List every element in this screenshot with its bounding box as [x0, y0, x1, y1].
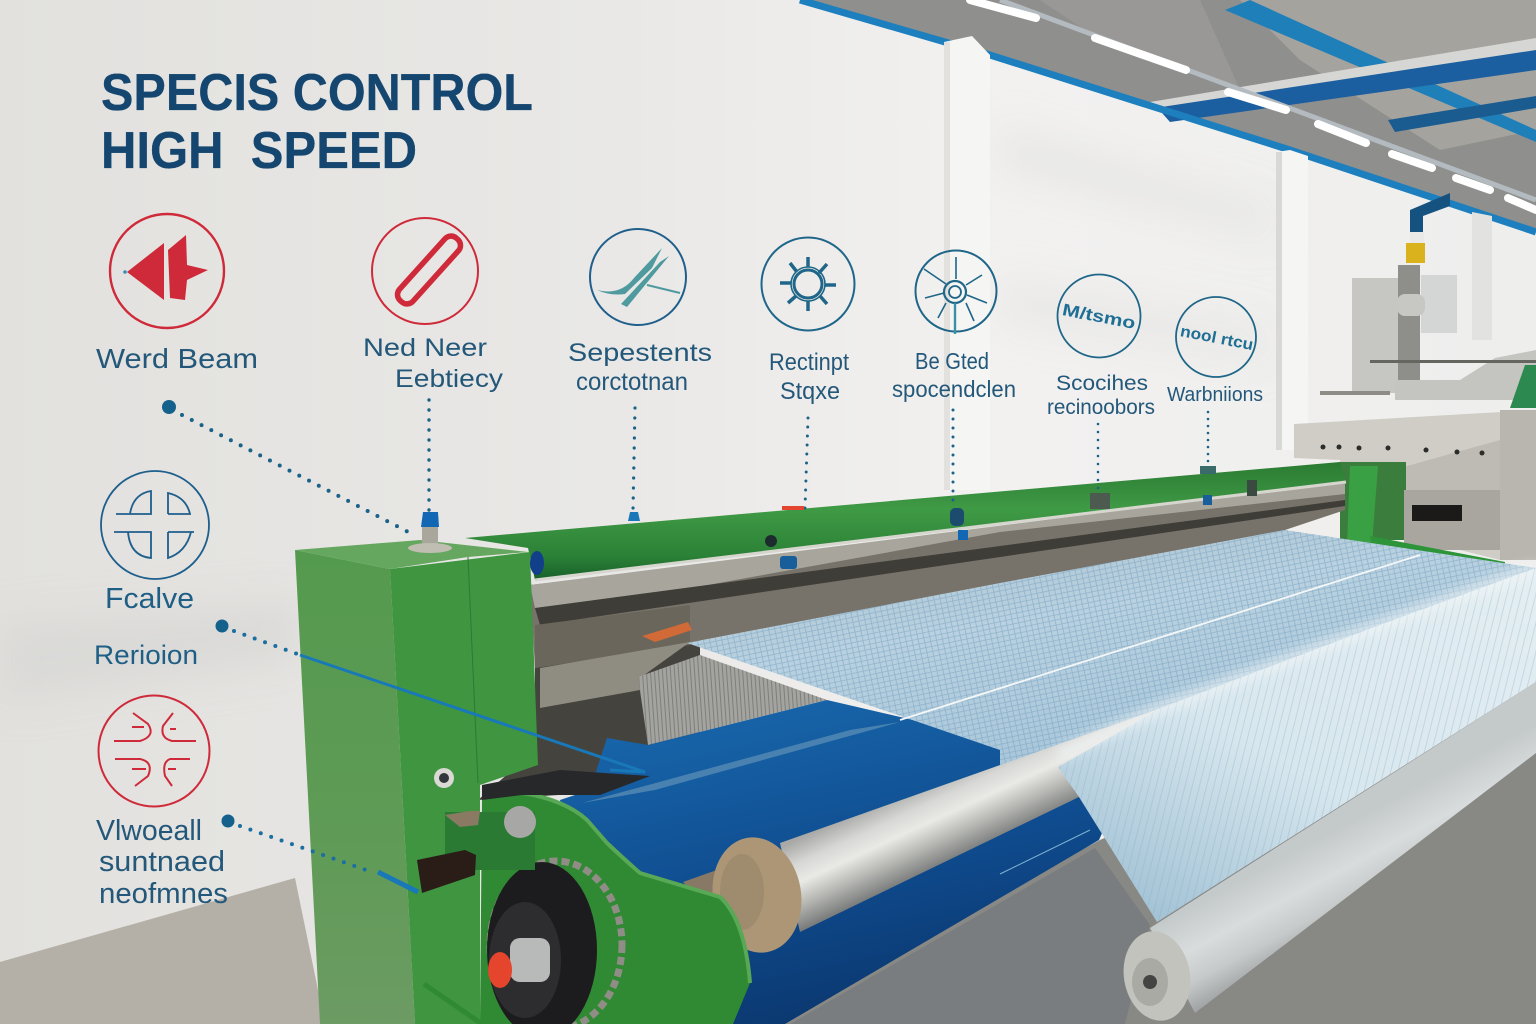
motion-blurred floor band [790, 848, 1150, 1024]
icon: Rectinpt Stoxe [762, 238, 854, 330]
label: Be Gted spocendclen [892, 348, 1016, 402]
icon: Mrtsmo badge [1058, 274, 1140, 358]
label: Sepestents corctotnan [568, 339, 712, 396]
ceiling [800, 0, 1536, 232]
label: Vlwoeall suntnaed neofmnes [96, 815, 228, 910]
large silver roll [780, 708, 1161, 932]
dark loom interior [478, 620, 700, 800]
label: Vlwoeall suntnaed neofmnes: Vlwoeall [96, 815, 202, 847]
icon: Be Gted [916, 250, 996, 334]
dotted leader: Sepestents [633, 408, 635, 510]
dotted leader: Scocihes [1097, 424, 1099, 498]
icon: Fcalve [101, 471, 209, 579]
title: HIGH SPEED [101, 122, 417, 180]
icon: nool rtcu badge [1176, 297, 1256, 377]
dotted leader: Be Gted [952, 410, 954, 505]
label: Fcalve: Fcalve [105, 583, 194, 615]
ceiling lights [970, 0, 1536, 210]
label: Ned Neer Eebtiecy: Eebtiecy [395, 365, 504, 393]
blue drum [560, 700, 1161, 1024]
icon: nool rtcu badge: nool rtcu [1179, 323, 1255, 354]
icon: Vlwoeall [98, 696, 210, 806]
wall pillars [944, 36, 1492, 490]
label: Rectinpt Stoxe [769, 349, 849, 405]
beater and reed [530, 482, 1345, 745]
title: SPECIS CONTROL [101, 64, 533, 122]
rear machine head [1320, 193, 1536, 408]
tension bracket and lever [417, 768, 536, 893]
wall shading [0, 130, 1270, 700]
dotted leader: Warbniions [1207, 412, 1209, 466]
sensor clips on rail [408, 466, 1257, 575]
label: Werd Beam: Werd Beam [96, 343, 258, 374]
label: Sepestents corctotnan: corctotnan [576, 368, 688, 396]
label: Rerioion: Rerioion [94, 640, 198, 670]
title [101, 64, 533, 180]
wood roll end [683, 830, 810, 960]
icon: Werd Beam [110, 214, 224, 328]
woven fabric: flat section [687, 530, 1536, 766]
icon: Sepestents [590, 229, 686, 325]
icon: Ned Neer [372, 218, 478, 324]
dotted leader: Rectinpt [805, 418, 808, 508]
structural rail behind lights [1000, 0, 1536, 200]
label: Sepestents corctotnan: Sepestents [568, 339, 712, 367]
label: Be Gted spocendclen: spocendclen [892, 376, 1016, 402]
green main frame [295, 540, 538, 1024]
machine gearbox [1294, 410, 1536, 572]
drive wheel [487, 861, 622, 1024]
machine grime strip [482, 770, 650, 800]
lower white roller [1117, 682, 1536, 1024]
right floor [760, 640, 1536, 1024]
label: Be Gted spocendclen: Be Gted [915, 348, 989, 374]
blue callout strand [300, 655, 645, 772]
label: Rectinpt Stoxe: Rectinpt [769, 349, 849, 376]
label: Scocihes recinoobors: Scocihes [1056, 372, 1148, 395]
label: Ned Neer Eebtiecy [363, 334, 504, 393]
dotted leader: Ned Neer [427, 400, 431, 514]
dotted leader: Werd Beam [162, 400, 416, 536]
dotted leader: Vlwoeall [222, 814, 418, 892]
green side plate [424, 793, 750, 1024]
label: Vlwoeall suntnaed neofmnes: neofmnes [99, 878, 228, 910]
floor [0, 878, 325, 1024]
dotted leader: Fcalve [216, 620, 300, 655]
label: Scocihes recinoobors: recinoobors [1047, 396, 1155, 419]
icon: Mrtsmo badge: M/tsmo [1061, 300, 1137, 333]
label: Vlwoeall suntnaed neofmnes: suntnaed [99, 846, 225, 878]
label: Warbniions: Warbniions [1167, 384, 1263, 406]
green top rail [465, 462, 1346, 580]
label: Ned Neer Eebtiecy: Ned Neer [363, 334, 487, 362]
label: Scocihes recinoobors [1047, 372, 1155, 419]
woven fabric: hanging section [1058, 568, 1536, 922]
label: Rectinpt Stoxe: Stqxe [780, 378, 840, 405]
